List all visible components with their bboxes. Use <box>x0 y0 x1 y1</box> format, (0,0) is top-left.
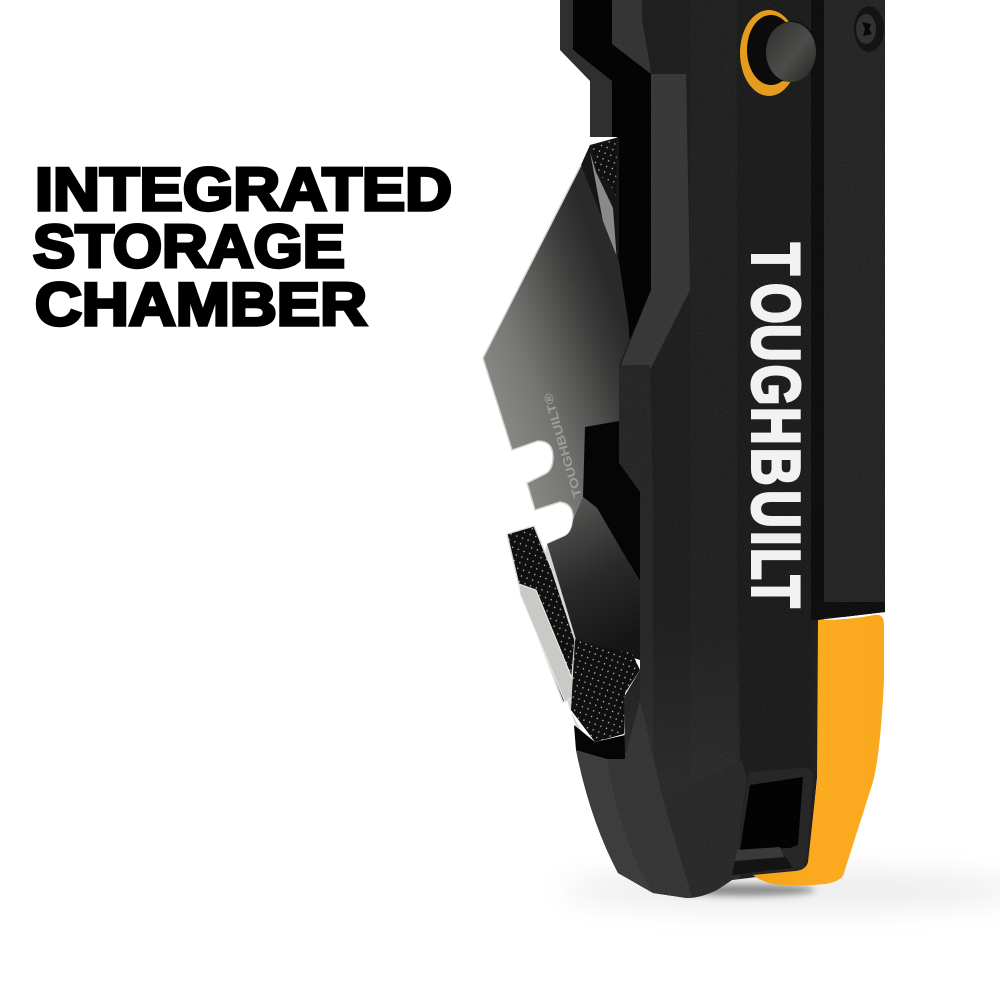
lower fade <box>600 719 740 898</box>
small stored blade behind <box>581 137 628 320</box>
slide pin <box>766 21 816 82</box>
utility knife <box>483 0 900 920</box>
heading: STORAGE <box>33 213 345 280</box>
blade cutting edge highlight <box>483 165 581 544</box>
cord window <box>732 768 813 876</box>
utility blade <box>483 165 630 660</box>
heading: CHAMBER <box>35 271 367 338</box>
window base <box>732 857 793 875</box>
raised grip facet <box>619 74 690 370</box>
lower front facet <box>692 760 747 898</box>
lower blade dark area <box>547 497 640 660</box>
side groove <box>811 0 824 620</box>
main face lighter <box>690 0 737 780</box>
torx screw <box>854 6 884 52</box>
ring inner shadow <box>747 15 795 85</box>
silver clip bar <box>519 584 578 702</box>
window opening <box>740 777 803 850</box>
heading <box>33 156 452 338</box>
rear housing plate <box>560 0 614 137</box>
ground shadow <box>560 870 1000 910</box>
center panel <box>737 0 812 780</box>
window sill <box>735 847 784 861</box>
upper shoulder facet <box>612 0 651 74</box>
orange pin ring <box>740 10 798 96</box>
dark inner channel <box>573 0 655 420</box>
surface grain <box>580 0 885 898</box>
blade engraved logo: TOUGHBUILT® <box>541 391 585 499</box>
spare blade edge <box>536 544 588 744</box>
black holder pocket <box>583 420 640 582</box>
right rail <box>824 0 885 612</box>
heading: INTEGRATED <box>35 156 452 223</box>
lower grip facet <box>619 365 650 486</box>
dotted blade tail <box>571 639 640 742</box>
knife body <box>576 0 885 898</box>
lower middle facet <box>607 700 693 900</box>
dotted blade clip <box>507 526 575 702</box>
brand logo: TOUGHBUILT <box>738 243 814 608</box>
chamber floor <box>574 725 625 760</box>
rail end band <box>818 602 885 617</box>
orange end cap <box>753 615 884 886</box>
bottom outer sliver <box>576 750 653 893</box>
